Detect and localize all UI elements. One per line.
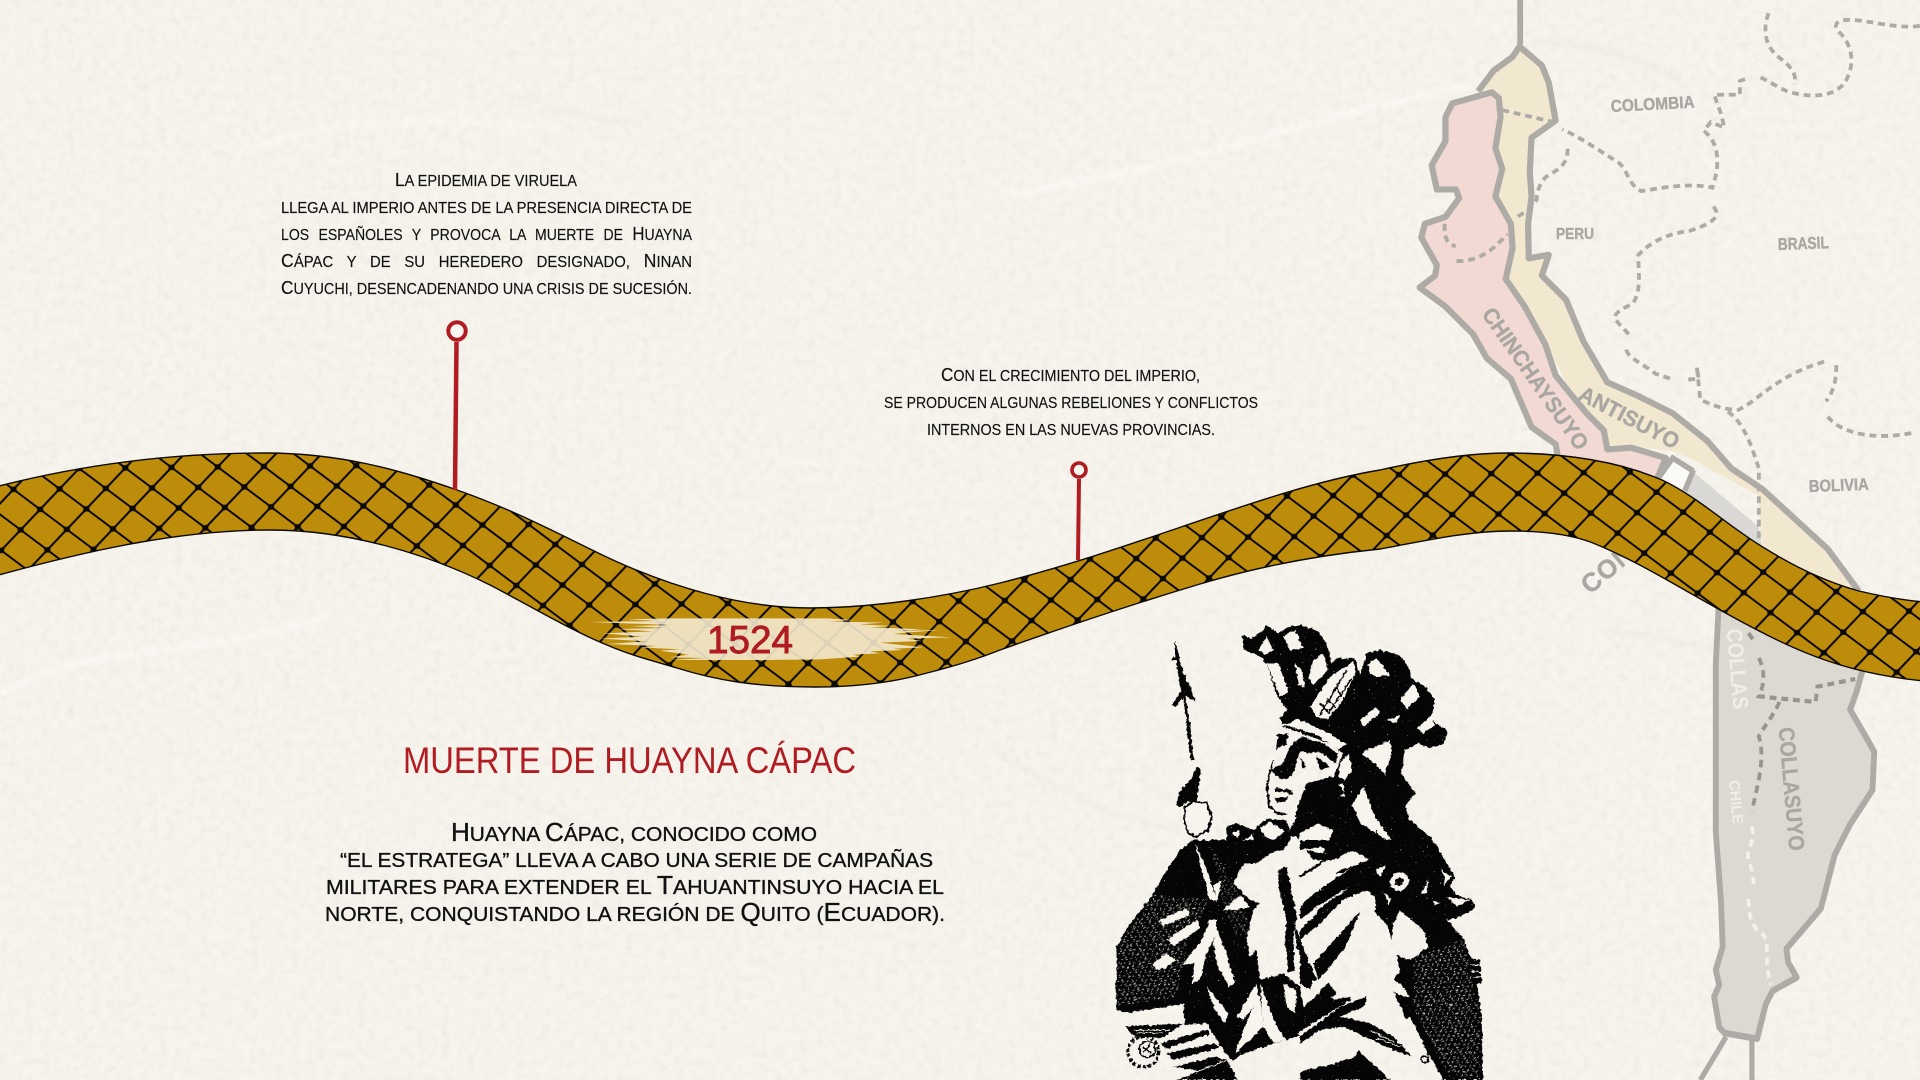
territory: Collasuyo — [1700, 595, 1874, 1080]
map labels — [1477, 93, 1869, 852]
bottom garment — [1300, 1050, 1390, 1080]
crown barbs — [1320, 670, 1352, 715]
territory: Chinchaysuyo — [1420, 92, 1666, 482]
map labels: BOLIVIA — [1808, 475, 1869, 496]
text block: Huayna Cápac description: HUAYNA CÁPAC, CONOCIDO COMO — [451, 819, 817, 847]
map labels: PERU — [1556, 226, 1594, 243]
map labels: BRASIL — [1777, 233, 1829, 254]
spear — [1172, 640, 1201, 807]
head and headdress — [1227, 625, 1448, 863]
map of Tahuantinsuyo — [1420, 0, 1920, 1080]
sleeve hatching — [1413, 940, 1480, 1080]
text block: Huayna Cápac description: NORTE, CONQUISTANDO LA REGIÓN DE QUITO (ECUADOR). — [325, 899, 945, 927]
map labels: CHILE — [1725, 779, 1746, 825]
territory: Contisuyo — [1520, 0, 1766, 572]
hanging ornament — [1422, 1056, 1428, 1063]
year label: 1524 — [707, 619, 793, 662]
country borders — [1445, 13, 1920, 541]
tunic chain and folds — [1278, 867, 1317, 980]
wedge — [1313, 912, 1360, 980]
pin: rebellions note — [1072, 463, 1086, 560]
map labels: COLOMBIA — [1610, 93, 1695, 116]
borders inside Collasuyo — [1748, 633, 1855, 985]
fur collar — [1227, 818, 1292, 863]
face shading — [1266, 733, 1345, 817]
territory: Antisuyo — [1478, 46, 1859, 591]
sleeve hatching — [1117, 895, 1210, 1007]
text block: Huayna Cápac description: “EL ESTRATEGA” LLEVA A CABO UNA SERIE DE CAMPAÑAS — [340, 849, 933, 872]
text block: epidemic: LOS ESPAÑOLES Y PROVOCA LA MUERTE DE HUAYNA — [281, 223, 693, 244]
map labels: CHINCHAYSUYO — [1477, 303, 1594, 455]
text block: epidemic: LA EPIDEMIA DE VIRUELA — [395, 169, 578, 190]
engraving portrait of Huayna Cápac — [1116, 625, 1483, 1080]
text block: Huayna Cápac description — [325, 819, 945, 927]
map labels: COLLAS — [1722, 628, 1753, 710]
ribbons and highlights — [1132, 843, 1350, 1053]
sleeve and torso shading — [1116, 840, 1350, 1080]
lower hand and ornament — [1125, 1023, 1238, 1080]
text block: Huayna Cápac description: MILITARES PARA EXTENDER EL TAHUANTINSUYO HACIA EL — [326, 872, 944, 900]
sleeve feathers — [1300, 997, 1412, 1057]
pin: epidemic note — [448, 322, 466, 490]
title: MUERTE DE HUAYNA CÁPAC — [403, 740, 856, 781]
text block: epidemic: CUYUCHI, DESENCADENANDO UNA CRISIS DE SUCESIÓN. — [281, 277, 692, 298]
tunic band — [1300, 858, 1470, 930]
brush stroke — [590, 618, 952, 660]
tunic emblem — [1320, 862, 1367, 910]
text block: epidemic — [281, 169, 693, 298]
text block: epidemic: LLEGA AL IMPERIO ANTES DE LA PRESENCIA DIRECTA DE — [281, 200, 692, 217]
text block: rebellions: INTERNOS EN LAS NUEVAS PROVINCIAS. — [927, 422, 1215, 439]
raised hand — [1184, 802, 1212, 837]
text block: epidemic: CÁPAC Y DE SU HEREDERO DESIGNADO, NINAN — [281, 250, 692, 271]
right sleeve and hair — [1300, 840, 1483, 1080]
text block: rebellions: SE PRODUCEN ALGUNAS REBELIONES Y CONFLICTOS — [884, 395, 1258, 412]
text block: rebellions: CON EL CRECIMIENTO DEL IMPERIO, — [941, 364, 1200, 385]
map labels: CONTISUYO — [1575, 471, 1719, 600]
year marker 1524 — [590, 618, 952, 662]
text block: rebellions — [884, 364, 1258, 439]
timeline ribbon — [0, 453, 1920, 687]
map labels: ANTISUYO — [1575, 381, 1684, 454]
side blocks — [1468, 958, 1482, 983]
map labels: COLLASUYO — [1774, 726, 1809, 852]
plume highlights — [1258, 630, 1435, 853]
